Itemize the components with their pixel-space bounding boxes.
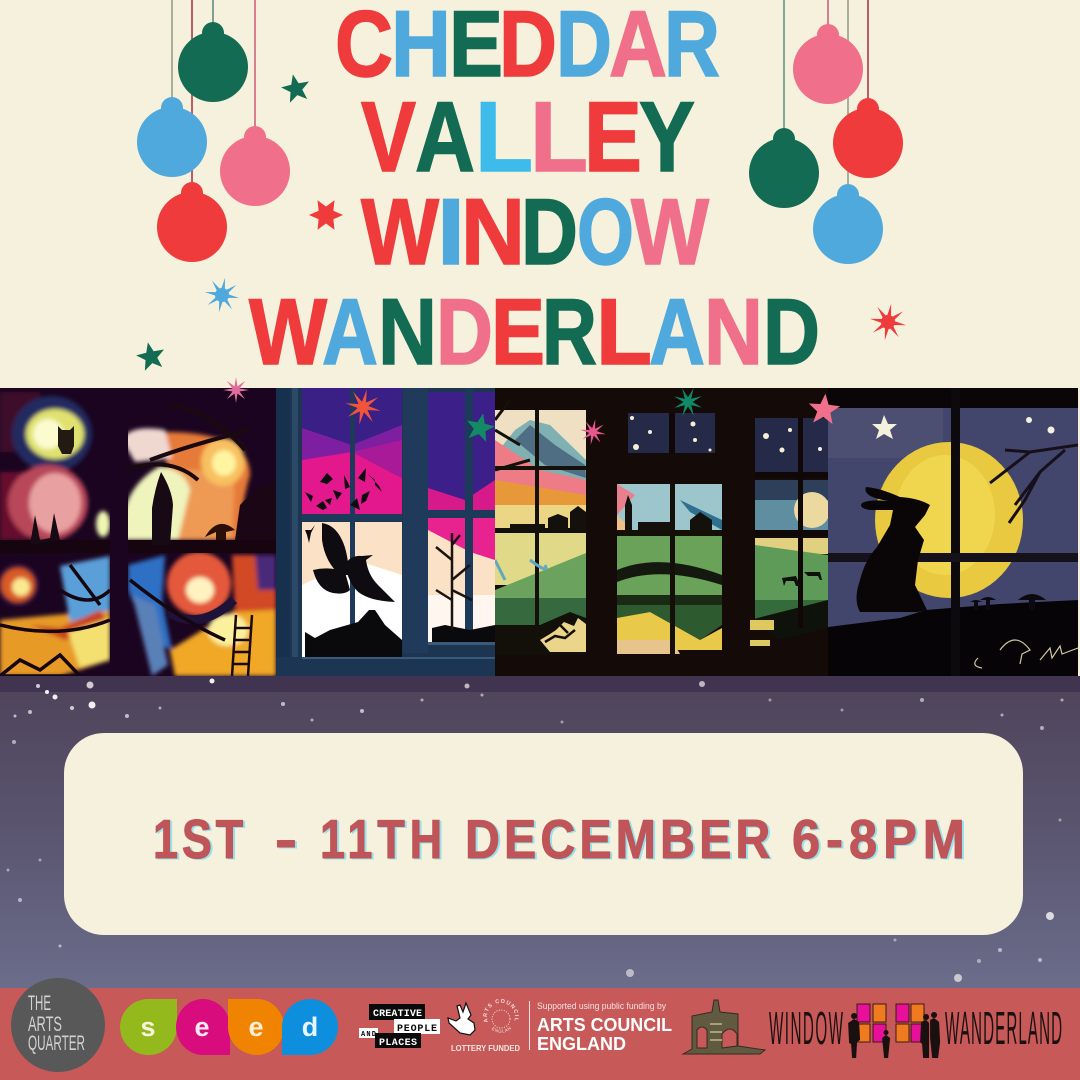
logo: National Lottery hand [448,1003,475,1035]
title: Y [639,81,695,192]
date panel [64,733,1023,935]
title: O [577,179,634,284]
crow [313,523,395,602]
cream header background [0,0,1080,388]
middle window [617,484,722,656]
right window panes [428,392,495,500]
logo: The Arts Quarter: QUARTER [28,1032,85,1055]
photo 2: crow window [276,388,495,676]
date text: - [275,808,297,870]
title: E [491,279,545,384]
title: L [475,81,533,192]
logo: seed [120,999,338,1055]
mushroom scribble [975,640,1078,668]
date text [153,808,965,870]
owl [58,426,74,454]
Arts Council England text: ARTS COUNCIL [537,1015,672,1035]
title: A [322,279,378,384]
photo 1: fairytale tree window [0,388,276,676]
title: A [649,279,705,384]
title: N [378,279,437,384]
decorative stars on cream [134,71,909,372]
left window [495,400,586,655]
logo: seed: e [194,1012,210,1042]
title: D [763,279,820,384]
date text: 6-8PM [792,809,965,870]
date text: DECEMBER [465,808,770,870]
logo: seed: s [140,1012,156,1042]
top small window [628,413,715,453]
small bird [305,525,315,543]
Arts Council England text: Supported using public funding by [537,1001,666,1012]
baubles left cluster [137,0,290,262]
logo: Creative People and Places: AND [361,1031,376,1039]
logo: Arts Council ring: ARTS COUNCIL [483,999,519,1022]
logo: The Arts Quarter: ARTS [28,1013,62,1036]
title: D [521,179,578,284]
title: V [361,81,416,192]
logo: The Arts Quarter: THE [28,992,51,1015]
title: A [415,81,475,192]
purple night background panel [0,676,1080,988]
title: N [704,279,763,384]
title: W [249,279,327,384]
mushrooms [970,594,1046,610]
title: N [461,179,525,284]
logo: seed: d [302,1012,318,1042]
Arts Council England text [537,1001,672,1054]
logo: Window Wanderland [769,1004,1062,1058]
right window [750,418,830,646]
branch [990,445,1078,523]
flock [305,468,382,510]
photo 3: landscape window [495,388,830,676]
divider [529,1001,530,1050]
logo: Creative People and Places: PEOPLE [397,1024,437,1035]
left window panes [302,388,402,478]
logo: market cross monument [683,1000,765,1054]
date text: 1ST [153,808,243,870]
hare [856,487,930,612]
date text: 11TH [320,808,442,870]
title: L [530,81,588,192]
photo 4: moon hare window [828,388,1078,676]
snow speckles [6,678,1064,982]
logo: Arts Council ring: ENGLAND [492,1026,511,1033]
logo: Arts Council ring [451,999,520,1053]
village silhouette [305,610,402,657]
Arts Council England text: ENGLAND [537,1034,626,1054]
logo: Creative People and Places: PLACES [379,1038,417,1049]
logo: Creative People and Places [359,1004,440,1049]
window stars [630,416,822,452]
logo: seed: e [248,1012,264,1042]
baubles right cluster [749,0,903,264]
logo: Window Wanderland: WANDERLAND [945,1004,1062,1055]
logo: The Arts Quarter [11,978,105,1072]
title: W [631,179,709,284]
stars over photos [223,377,841,447]
title [249,0,820,384]
title: L [596,279,652,384]
title: E [584,81,642,192]
bare tree [436,533,472,630]
title: I [437,179,465,284]
title: R [542,279,597,384]
title: D [436,279,493,384]
title: W [361,179,439,284]
logo: Window Wanderland: WINDOW [769,1004,843,1055]
logo: Creative People and Places: CREATIVE [373,1009,422,1020]
logo: Arts Council ring: LOTTERY FUNDED [451,1043,520,1053]
sponsor footer bar [0,988,1080,1080]
